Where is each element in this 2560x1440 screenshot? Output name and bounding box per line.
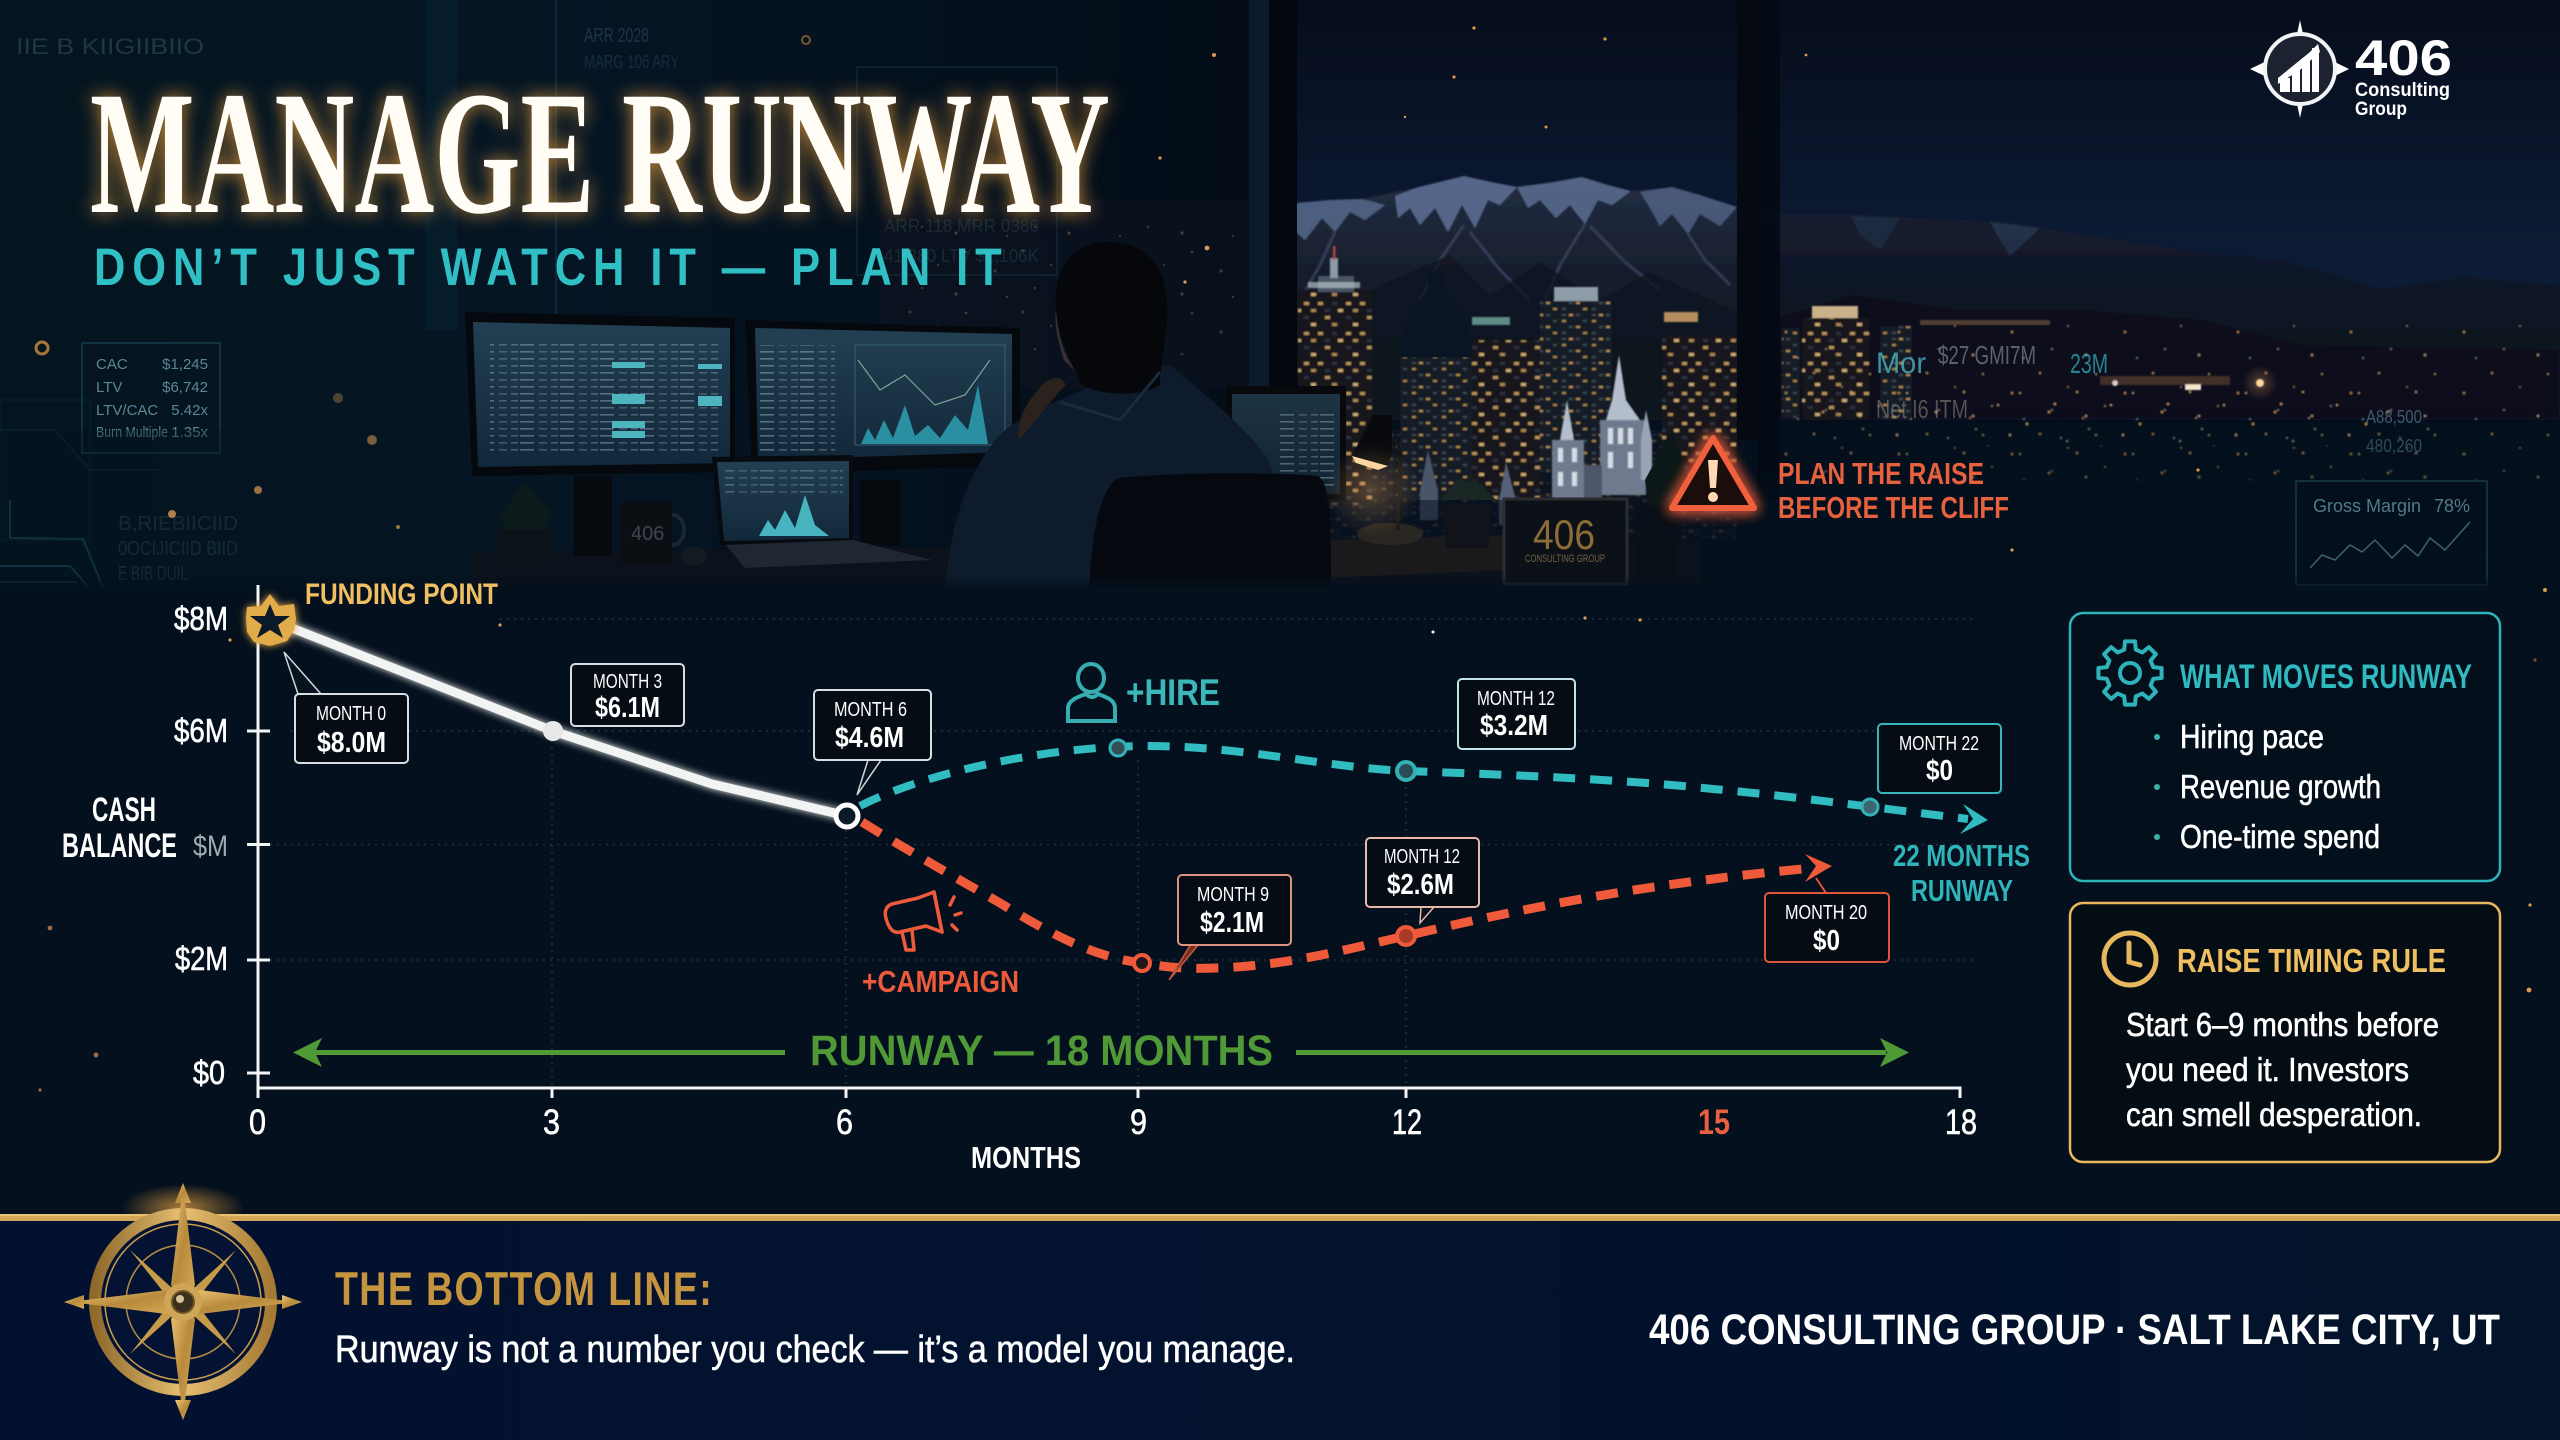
406 desk plaque: CONSULTING GROUP [1525,553,1605,565]
ghost HUD data: MARG 106 ARY [584,52,679,72]
406 desk plaque: 406 [1533,511,1595,558]
mug [620,502,684,564]
ghost HUD data: 2.3M [119,1054,160,1076]
ghost HUD data: A88,500 [2366,407,2422,427]
subtitle: DON’T JUST WATCH IT — PLAN IT [94,238,1002,297]
campaign label with megaphone [862,892,1019,999]
left monitor [465,312,735,556]
bullet list: One-time spend [2180,818,2380,855]
orange scenario: campaign [862,822,1832,971]
ghost HUD data: 41,880 LTV $1,106K [884,246,1039,266]
icon: clock [2104,933,2156,985]
rule text: can smell desperation. [2126,1096,2422,1133]
warning callout [1672,438,2009,525]
panel: what moves runway: WHAT MOVES RUNWAY [2180,658,2472,696]
chart: cash balance runway [62,524,2030,1175]
callout: month 12 orange: $2.6M [1387,869,1454,901]
teal scenario: hire [860,740,1988,834]
icon: gold compass [64,1183,302,1420]
rule text: you need it. Investors [2126,1051,2409,1088]
ghost HUD data: B,RIEBIICIID [118,513,238,535]
callout: month 0: MONTH 0 [316,703,386,725]
plant pot [1440,430,1690,580]
rule text: Start 6–9 months before [2126,1006,2439,1043]
x axis labels: 12 [1392,1103,1422,1142]
icon: funding star [246,594,296,646]
grid lines [270,619,1973,1085]
ghost HUD data: Mor [1876,347,1926,380]
22 months runway label [1893,838,2030,908]
ghost HUD data: 78% [2434,496,2470,516]
laptop [680,455,932,568]
callout: month 3: MONTH 3 [593,671,662,693]
bullet list: Revenue growth [2180,768,2381,805]
domed capitol silhouette [1400,270,1470,357]
callout: month 12 teal [1458,679,1575,749]
warning callout: BEFORE THE CLIFF [1778,490,2009,525]
desk workspace [465,242,1700,590]
diagonal points [130,1250,236,1354]
footer band [0,1214,2560,1440]
y axis title [62,791,177,865]
y axis title: BALANCE [62,827,177,865]
hire label with icon [1068,664,1220,721]
ghost HUD data: ARR 118 MRR 0386 [884,216,1039,236]
callout: month 22: $0 [1926,755,1953,787]
callout: month 20: $0 [1813,925,1840,957]
y axis labels: $M [193,830,228,863]
runway span arrow [293,1027,1909,1075]
ghost HUD data [0,25,2487,1161]
callout: month 12 orange [1366,838,1479,923]
data points [543,721,858,827]
x axis labels: 18 [1945,1103,1977,1142]
ghost HUD data: 2.6M [119,1082,160,1104]
ghost HUD data: 23M [2070,348,2108,379]
callout: month 22: MONTH 22 [1899,733,1979,755]
callout: month 6: $4.6M [835,722,904,754]
axes [247,585,1960,1098]
chart background [0,430,2560,1220]
mug: 406 [631,523,664,545]
ghost HUD data: LTV/CAC [96,402,158,419]
ghost HUD data: $1,245 [162,356,208,373]
ghost HUD data: 0.4M [119,1139,160,1161]
callout: month 9 [1169,875,1291,980]
panel: raise timing rule: RAISE TIMING RULE [2177,942,2446,979]
cardinal points [64,1183,302,1420]
distant city lights [900,220,2560,489]
y axis labels: $8M [174,600,228,637]
warning callout: PLAN THE RAISE [1778,456,1984,491]
ghost HUD data: Net I6 ITM [1876,394,1968,424]
callout: month 22 [1878,724,2001,793]
left dark HUD wash [0,0,1250,600]
callout: month 0 [284,652,408,763]
panel: what moves runway [2070,613,2500,881]
callout: month 12 orange: MONTH 12 [1384,846,1460,868]
window mullions [1249,0,1269,400]
gold sparks [36,26,2547,1092]
bullet list: Hiring pace [2180,718,2324,755]
logo: 406 Consulting Group: Consulting [2355,80,2450,101]
office chair [1089,473,1331,590]
campaign label with megaphone: +CAMPAIGN [862,964,1019,999]
runway span arrow: RUNWAY — 18 MONTHS [810,1027,1273,1075]
panel: raise timing rule [2070,903,2500,1162]
ghost HUD data: ARR E0D3 [42,670,130,695]
temple spires [1420,355,1652,525]
funding point label: FUNDING POINT [305,578,498,611]
22 months runway label: 22 MONTHS [1893,838,2030,873]
ghost HUD data: 0OCIJICIID BIID [118,538,238,560]
x axis labels [249,1103,1977,1175]
right monitor with chart [745,320,1020,546]
ghost HUD data: 1.35x [171,424,208,441]
ghost HUD data: 3.9M [119,1112,160,1134]
desk lamp [1324,415,1423,545]
logo: 406 Consulting Group: Group [2355,99,2407,120]
icon: warning triangle [1672,438,1754,508]
callout: month 3: $6.1M [595,692,660,724]
man silhouette [946,242,1285,590]
y axis labels: $0 [193,1054,225,1091]
desk surface [470,540,1700,590]
ghost HUD data: 818M [14,1112,52,1134]
city skyline [1160,246,2050,540]
ghost HUD data: $27 GMI7M [1938,340,2036,370]
base burn line [269,619,847,816]
ghost HUD data: IIE B KIIGIIBIIO [16,34,204,59]
cliff marker line at month 15 [1711,524,1715,1088]
22 months runway label: RUNWAY [1911,873,2013,908]
callout: month 12 teal: $3.2M [1480,710,1548,742]
x axis labels: MONTHS [971,1140,1081,1175]
y axis title: CASH [92,791,156,829]
icon: gear [2098,641,2162,705]
callout: month 12 teal: MONTH 12 [1477,688,1555,710]
callout: month 20 [1765,878,1889,962]
y axis labels: $2M [175,940,228,977]
lower right fade [1760,410,2560,580]
x axis labels: 9 [1130,1103,1147,1142]
bottom line text: Runway is not a number you check — it’s a model you manage. [335,1329,1295,1371]
bullet list [2154,718,2381,855]
snow capped mountains [1250,176,2560,420]
callout: month 20: MONTH 20 [1785,902,1867,924]
y axis labels [174,600,228,1091]
ghost HUD data: LTV [96,379,122,396]
x axis labels: 15 [1698,1103,1730,1142]
ghost HUD data: Burn Multiple [96,424,168,441]
callout: month 3 [571,664,684,726]
logo: 406 Consulting Group: 406 [2355,30,2452,86]
x axis labels: 0 [249,1103,266,1142]
ghost HUD data: Gross Margin [2313,496,2421,516]
ghost HUD data: 5.42x [171,402,208,419]
x axis labels: 6 [836,1103,853,1142]
logo: 406 Consulting Group [2250,20,2452,120]
callout: month 9: MONTH 9 [1197,884,1269,906]
ghost HUD data: E BIB DUIL [118,563,188,585]
callout: month 0: $8.0M [317,727,386,759]
bottom line text [335,1263,1295,1371]
right side monitor [1226,386,1346,500]
bottom line text: THE BOTTOM LINE: [335,1263,712,1316]
x axis labels: 3 [543,1103,560,1142]
title: MANAGE RUNWAY [90,56,1110,251]
406 desk plaque [1504,499,1627,584]
ghost HUD data: ARR 2028 [584,25,649,47]
icon: compass logo [2250,20,2349,118]
ghost HUD data: 480,260 [2366,436,2422,456]
ghost HUD data: $6,742 [162,379,208,396]
callout: month 6: MONTH 6 [834,699,907,721]
ghost HUD data: CAC [96,356,128,373]
ghost HUD data: 91.8M [14,1139,52,1161]
y axis labels: $6M [174,712,228,749]
potted plant [498,482,554,562]
night sky [1250,0,2560,420]
circuit traces [0,430,179,767]
callout: month 9: $2.1M [1200,907,1264,939]
hire label with icon: +HIRE [1126,672,1220,713]
rule text [2126,1006,2439,1133]
callout: month 6 [814,690,931,795]
